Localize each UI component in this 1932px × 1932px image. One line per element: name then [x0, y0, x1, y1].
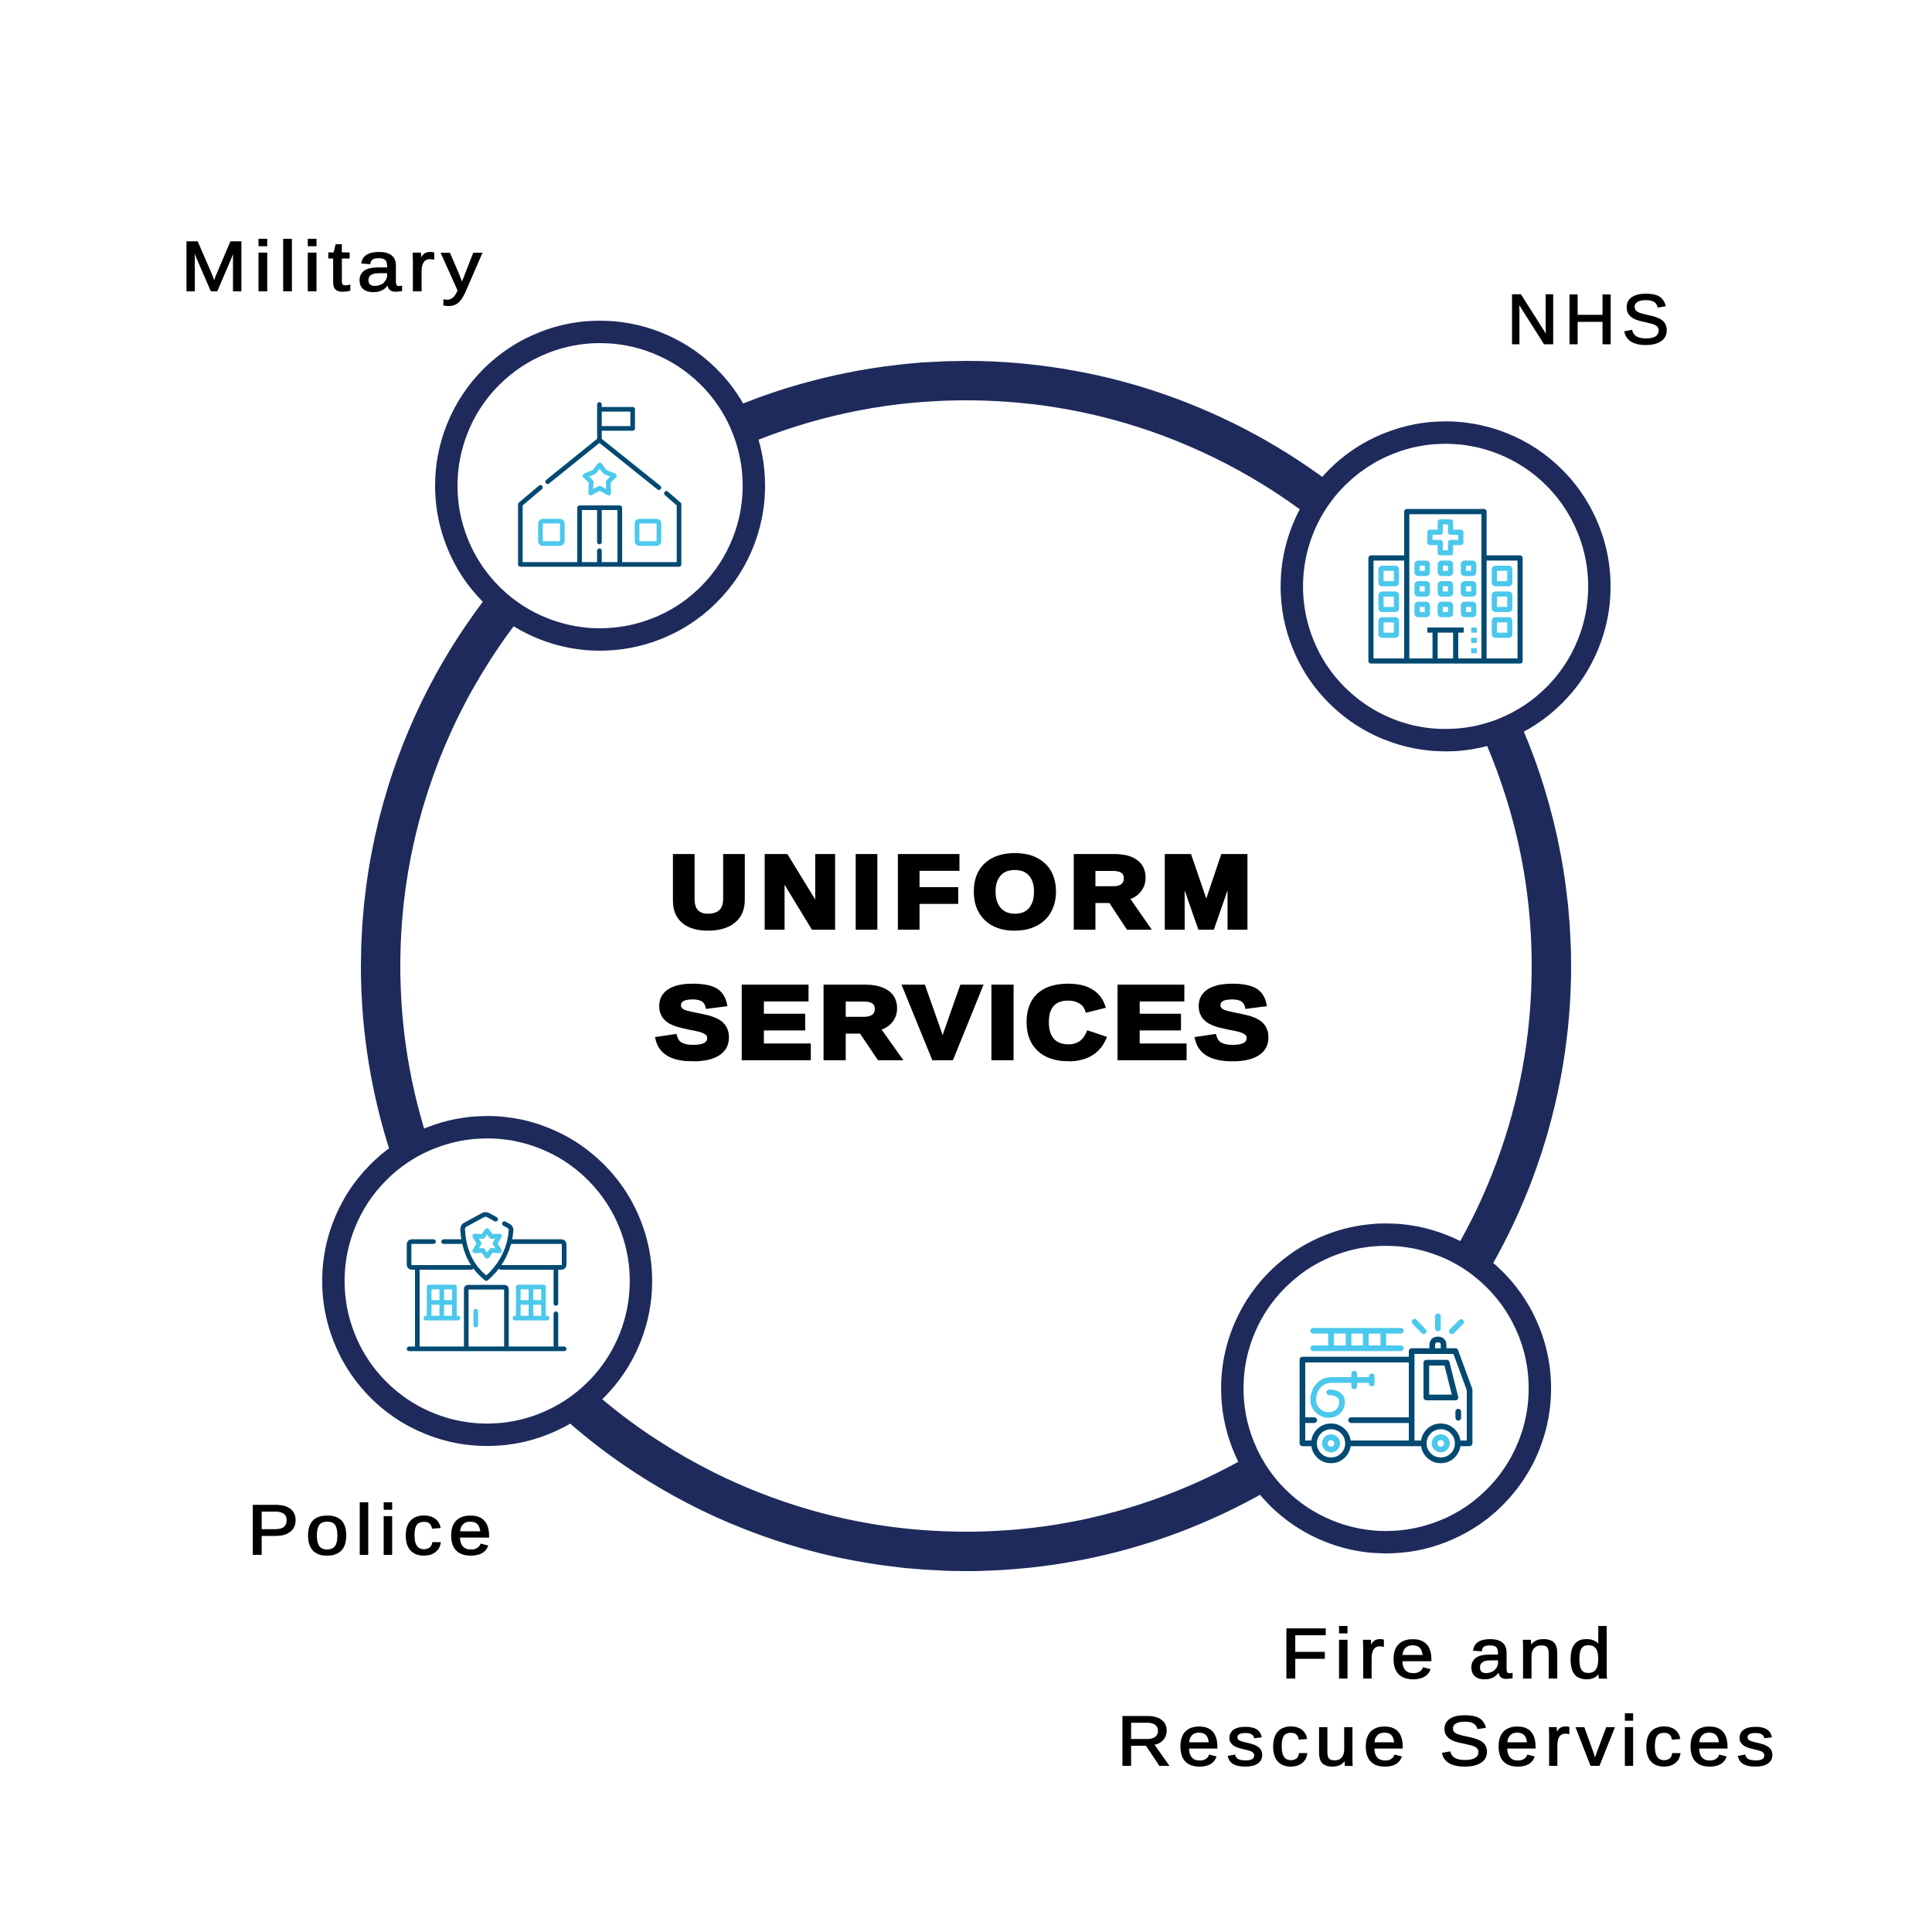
label line 1: Fire and — [1281, 1615, 1618, 1693]
title — [655, 835, 1277, 1079]
title line 1: UNIFORM — [669, 835, 1264, 949]
large connecting ring — [380, 380, 1552, 1552]
title line 2: SERVICES — [655, 966, 1277, 1079]
node: NHS — [1292, 433, 1600, 740]
icon: hospital — [1371, 512, 1520, 661]
node: Fire and Rescue — [1233, 1235, 1540, 1543]
node: Military — [447, 332, 754, 640]
label: Military: Military — [181, 228, 488, 306]
node circle: NHS — [1292, 433, 1600, 740]
label line 2: Rescue Services — [1117, 1702, 1781, 1781]
node circle: Military — [447, 332, 754, 640]
node: Police — [333, 1128, 641, 1435]
label: NHS: NHS — [1507, 281, 1675, 359]
node circle: Police — [333, 1128, 641, 1435]
label: Police: Police — [247, 1492, 498, 1570]
icon: police station — [409, 1214, 564, 1349]
label: Fire and Rescue Services — [1117, 1615, 1781, 1781]
icon: fire engine — [1302, 1316, 1470, 1461]
icon: military base with flag — [520, 404, 679, 564]
node circle: Fire and Rescue — [1233, 1235, 1540, 1543]
